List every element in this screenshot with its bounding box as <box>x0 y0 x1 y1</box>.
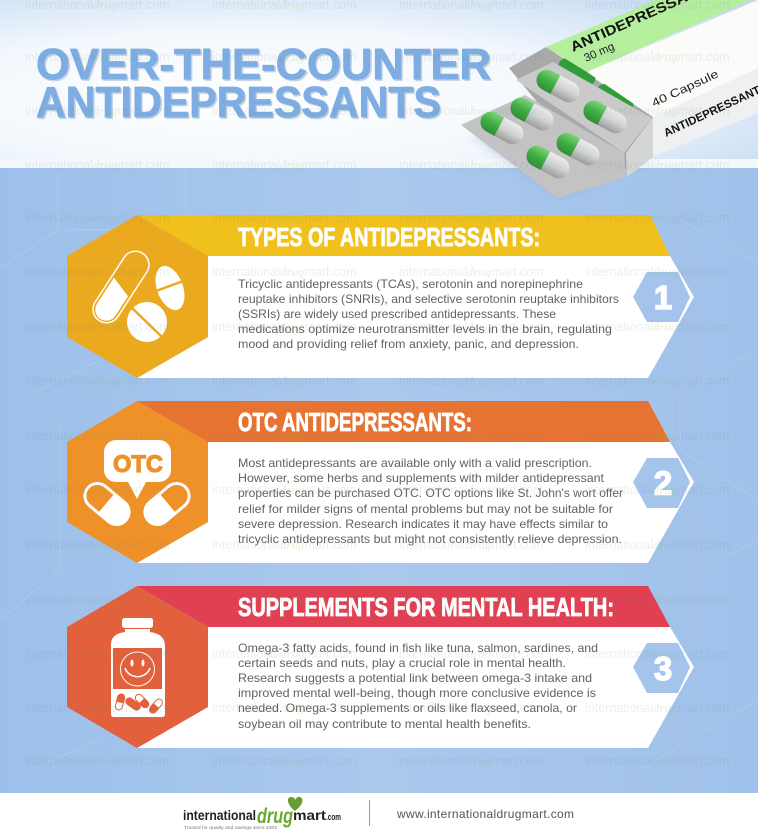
watermarks: drugmart.com <box>653 538 730 552</box>
page background <box>0 168 758 793</box>
body text: Most antidepressants are available only with a valid prescription. <box>238 457 592 470</box>
body text: needed. Omega-3 supplements or oils like flaxseed, canola, or <box>238 702 577 715</box>
watermarks: international <box>25 593 93 607</box>
watermarks: international <box>212 320 280 334</box>
watermarks: international <box>25 211 93 225</box>
watermarks: international <box>585 320 653 334</box>
body text: certain seeds and nuts, play a crucial role in mental health. <box>238 657 566 670</box>
logo heart <box>288 797 302 811</box>
watermarks: international <box>585 50 653 64</box>
watermarks: drugmart.com <box>653 429 730 443</box>
watermarks: drugmart.com <box>280 429 357 443</box>
body text: Omega-3 fatty acids, found in fish like tuna, salmon, sardines, and <box>238 642 598 655</box>
watermarks: international <box>585 483 653 497</box>
footer website: www.internationaldrugmart.com <box>396 807 574 821</box>
number badge 1: 1 <box>654 279 672 316</box>
watermarks: international <box>399 538 467 552</box>
watermarks: international <box>585 211 653 225</box>
watermarks: international <box>25 265 93 279</box>
watermarks: drugmart.com <box>93 374 170 388</box>
watermarks: international <box>399 158 467 172</box>
heading: SUPPLEMENTS FOR MENTAL HEALTH: <box>238 594 614 622</box>
body text: soybean oil may contribute to mental health benefits. <box>238 718 531 731</box>
watermarks: drugmart.com <box>280 754 357 768</box>
watermarks: drugmart.com <box>467 647 544 661</box>
watermarks: drugmart.com <box>467 429 544 443</box>
body text: severe depression. Research indicates it may have effects similar to <box>238 518 608 531</box>
watermarks: international <box>25 538 93 552</box>
hidden capsules <box>556 55 598 89</box>
watermarks: drugmart.com <box>93 211 170 225</box>
box shadow <box>470 130 650 196</box>
watermarks: drugmart.com <box>653 593 730 607</box>
number badge 3 <box>633 643 690 693</box>
watermarks: drugmart.com <box>653 374 730 388</box>
watermarks: drugmart.com <box>280 647 357 661</box>
watermarks: drugmart.com <box>467 50 544 64</box>
heading band <box>137 215 670 256</box>
title <box>36 41 492 128</box>
watermarks: international <box>399 211 467 225</box>
icon: OTC bubble with capsules: OTC <box>113 451 163 478</box>
watermarks: international <box>25 647 93 661</box>
text panel <box>137 442 694 563</box>
watermarks: international <box>585 647 653 661</box>
watermarks: international <box>212 265 280 279</box>
watermarks: drugmart.com <box>653 483 730 497</box>
watermarks: drugmart.com <box>467 538 544 552</box>
box green label <box>546 0 750 72</box>
pill box illustration: 40 Capsule <box>650 68 721 110</box>
number badge 1 <box>633 272 690 322</box>
watermarks: drugmart.com <box>467 104 544 118</box>
watermarks: international <box>399 701 467 715</box>
panel: OTC antidepressants <box>67 401 694 563</box>
watermarks: drugmart.com <box>467 374 544 388</box>
watermarks: drugmart.com <box>280 320 357 334</box>
watermarks: drugmart.com <box>467 211 544 225</box>
watermarks: drugmart.com <box>280 593 357 607</box>
watermarks: international <box>585 538 653 552</box>
watermarks: international <box>399 647 467 661</box>
footer logo: drug <box>257 805 293 828</box>
watermarks: drugmart.com <box>93 429 170 443</box>
watermarks: drugmart.com <box>280 104 357 118</box>
watermarks: drugmart.com <box>467 701 544 715</box>
title: OVER-THE-COUNTER <box>38 42 492 90</box>
title: OVER-THE-COUNTER <box>36 41 491 89</box>
heading band <box>137 586 670 627</box>
watermarks: international <box>212 104 280 118</box>
title: ANTIDEPRESSANTS <box>36 79 441 127</box>
pill box illustration <box>461 0 758 198</box>
body text: tricyclic antidepressants but might not consistently relieve depression. <box>238 533 622 546</box>
watermarks: international <box>399 320 467 334</box>
watermarks: drugmart.com <box>280 701 357 715</box>
watermarks: international <box>25 158 93 172</box>
watermarks: international <box>212 429 280 443</box>
front capsules <box>507 94 557 134</box>
watermarks: international <box>212 50 280 64</box>
footer logo: mart <box>293 808 327 823</box>
icon: supplement bottle <box>111 618 165 717</box>
body text: Research suggests a potential link between omega-3 intake and <box>238 672 592 685</box>
watermarks: international <box>25 701 93 715</box>
body text: reuptake inhibitors (SNRIs), and selective serotonin reuptake inhibitors <box>238 293 619 306</box>
watermarks: drugmart.com <box>653 754 730 768</box>
watermarks: international <box>585 429 653 443</box>
body text: mood and providing relief from anxiety, panic, and depression. <box>238 338 579 351</box>
body text: However, some herbs and supplements with milder antidepressant <box>238 472 605 485</box>
watermarks: drugmart.com <box>467 320 544 334</box>
body text: relief for milder signs of mental problems but may not be suitable for <box>238 503 613 516</box>
footer logo: .com <box>326 812 341 822</box>
watermarks: international <box>25 50 93 64</box>
blister front <box>461 95 626 198</box>
watermarks: drugmart.com <box>93 320 170 334</box>
watermarks: international <box>399 374 467 388</box>
watermarks: drugmart.com <box>93 593 170 607</box>
watermarks: international <box>212 158 280 172</box>
icon: OTC bubble with capsules <box>80 440 194 530</box>
text panel <box>137 627 694 748</box>
watermarks: drugmart.com <box>280 483 357 497</box>
number badge 2 <box>633 458 690 508</box>
watermarks: drugmart.com <box>467 158 544 172</box>
watermarks: drugmart.com <box>280 211 357 225</box>
watermarks: drugmart.com <box>93 701 170 715</box>
body text <box>238 642 598 731</box>
watermarks: drugmart.com <box>653 701 730 715</box>
watermarks: international <box>585 374 653 388</box>
watermarks: international <box>212 483 280 497</box>
body text: medications optimize neurotransmitter levels in the brain, regulating <box>238 323 612 336</box>
blister back <box>516 62 652 153</box>
watermarks: drugmart.com <box>93 538 170 552</box>
watermarks: drugmart.com <box>93 104 170 118</box>
hexagon <box>67 401 208 563</box>
watermarks: international <box>585 104 653 118</box>
watermarks: drugmart.com <box>93 158 170 172</box>
watermarks: international <box>399 593 467 607</box>
watermarks: drugmart.com <box>467 754 544 768</box>
watermarks: international <box>212 374 280 388</box>
watermarks: international <box>399 754 467 768</box>
watermarks: international <box>212 593 280 607</box>
watermarks: international <box>585 265 653 279</box>
watermarks: international <box>25 429 93 443</box>
watermarks: drugmart.com <box>653 211 730 225</box>
watermarks: international <box>585 158 653 172</box>
pill box illustration: 30 mg <box>582 41 616 65</box>
watermarks: drugmart.com <box>280 374 357 388</box>
watermarks: drugmart.com <box>653 50 730 64</box>
number badge 3: 3 <box>654 650 672 687</box>
watermarks: drugmart.com <box>280 50 357 64</box>
watermarks: international <box>212 538 280 552</box>
watermarks: international <box>25 374 93 388</box>
body text: (SSRIs) are widely used prescribed antidepressants. These <box>238 308 556 321</box>
watermarks: drugmart.com <box>467 483 544 497</box>
watermarks: drugmart.com <box>653 158 730 172</box>
body text: properties can be purchased OTC. OTC options like St. John's wort offer <box>238 487 623 500</box>
watermarks: drugmart.com <box>93 50 170 64</box>
watermarks: drugmart.com <box>93 754 170 768</box>
watermarks: drugmart.com <box>653 265 730 279</box>
body text: improved mental well-being, though more conclusive evidence is <box>238 687 596 700</box>
watermarks: international <box>212 647 280 661</box>
watermarks: international <box>399 265 467 279</box>
box side face <box>653 68 758 157</box>
body text <box>238 457 623 546</box>
footer logo: Trusted for quality and savings since 2003 <box>184 825 278 830</box>
footer logo: international <box>183 808 256 823</box>
hexagon <box>67 215 208 378</box>
footer <box>0 793 758 834</box>
panel: supplements for mental health <box>67 586 694 748</box>
heading: OTC ANTIDEPRESSANTS: <box>238 409 472 437</box>
watermarks: international <box>399 483 467 497</box>
box front flap <box>626 117 653 177</box>
number badge 2: 2 <box>654 464 672 502</box>
heading: TYPES OF ANTIDEPRESSANTS: <box>238 224 540 252</box>
watermarks: drugmart.com <box>653 320 730 334</box>
watermarks: international <box>585 701 653 715</box>
watermarks: international <box>25 483 93 497</box>
header background <box>0 0 758 160</box>
body text: Tricyclic antidepressants (TCAs), serotonin and norepinephrine <box>238 278 583 291</box>
watermarks: drugmart.com <box>467 593 544 607</box>
hexagon <box>67 586 208 748</box>
watermarks: drugmart.com <box>280 265 357 279</box>
watermarks: international <box>399 104 467 118</box>
watermarks: drugmart.com <box>93 265 170 279</box>
watermarks: drugmart.com <box>653 647 730 661</box>
watermarks: international <box>399 50 467 64</box>
watermarks: drugmart.com <box>93 647 170 661</box>
watermarks: international <box>212 701 280 715</box>
watermarks: international <box>25 320 93 334</box>
back capsules <box>533 66 583 106</box>
footer logo <box>183 797 341 830</box>
watermarks: international <box>585 754 653 768</box>
watermarks: international <box>212 754 280 768</box>
watermarks: international <box>399 429 467 443</box>
watermarks: international <box>25 754 93 768</box>
box interior <box>509 47 653 170</box>
watermarks: drugmart.com <box>280 538 357 552</box>
watermarks: international <box>585 593 653 607</box>
heading band <box>137 401 670 442</box>
watermarks: international <box>212 211 280 225</box>
watermarks: international <box>25 104 93 118</box>
title: ANTIDEPRESSANTS <box>38 80 442 128</box>
box white face <box>587 0 758 117</box>
watermarks: drugmart.com <box>467 265 544 279</box>
text panel <box>137 256 694 378</box>
panel: types of antidepressants <box>67 215 694 378</box>
watermarks: drugmart.com <box>653 104 730 118</box>
body text <box>238 278 619 351</box>
watermarks: drugmart.com <box>93 483 170 497</box>
watermarks: drugmart.com <box>280 158 357 172</box>
icon: pills <box>88 246 191 342</box>
